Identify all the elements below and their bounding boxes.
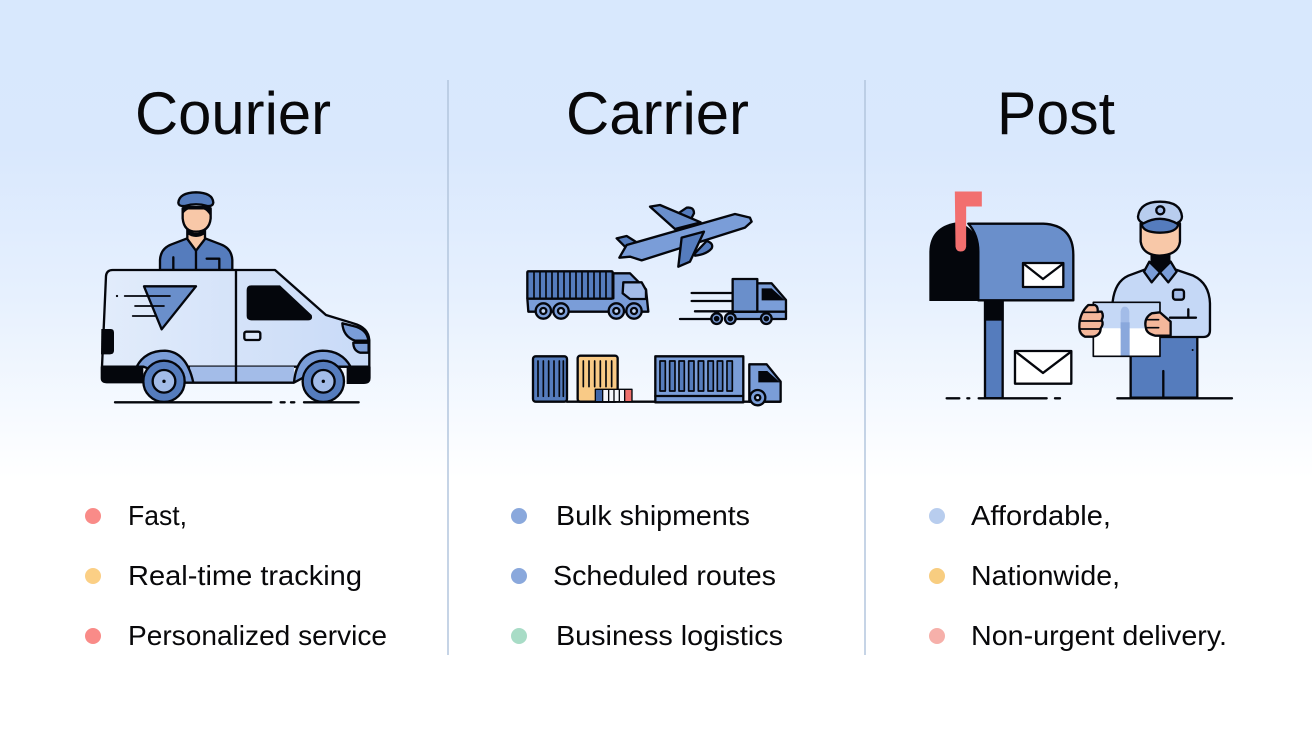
- van body: [102, 270, 369, 367]
- heading: Carrier: Carrier: [566, 80, 749, 147]
- list: post features: Non-urgent delivery.: [971, 620, 1227, 651]
- list: post features: [929, 500, 1227, 651]
- list: carrier features: [511, 500, 783, 651]
- heading: Courier: Courier: [135, 80, 331, 147]
- icon: mailbox and postal worker: [929, 192, 1232, 398]
- list: carrier features: Business logistics: [556, 620, 783, 651]
- list: post features: Affordable,: [971, 500, 1111, 531]
- list: courier features: Fast,: [128, 500, 187, 531]
- list: courier features: Personalized service: [128, 620, 387, 651]
- panel: carrier: [511, 80, 786, 651]
- panel: courier: [85, 80, 387, 651]
- containers and box truck: [533, 356, 781, 405]
- list: carrier features: Scheduled routes: [553, 560, 776, 591]
- heading: Post: Post: [997, 80, 1115, 147]
- list: courier features: [85, 500, 387, 651]
- driver: [160, 192, 232, 270]
- icon: courier van and driver: [101, 192, 371, 402]
- mailbox: [929, 192, 1073, 398]
- airplane: [617, 205, 752, 267]
- panel: post: [929, 80, 1232, 651]
- list: courier features: Real-time tracking: [128, 560, 362, 591]
- list: carrier features: Bulk shipments: [556, 500, 750, 531]
- icon: carrier fleet: [527, 205, 786, 405]
- container truck: [527, 271, 648, 319]
- postal worker: [1079, 202, 1232, 398]
- list: post features: Nationwide,: [971, 560, 1120, 591]
- fast truck: [680, 279, 786, 324]
- wheels: [137, 351, 351, 402]
